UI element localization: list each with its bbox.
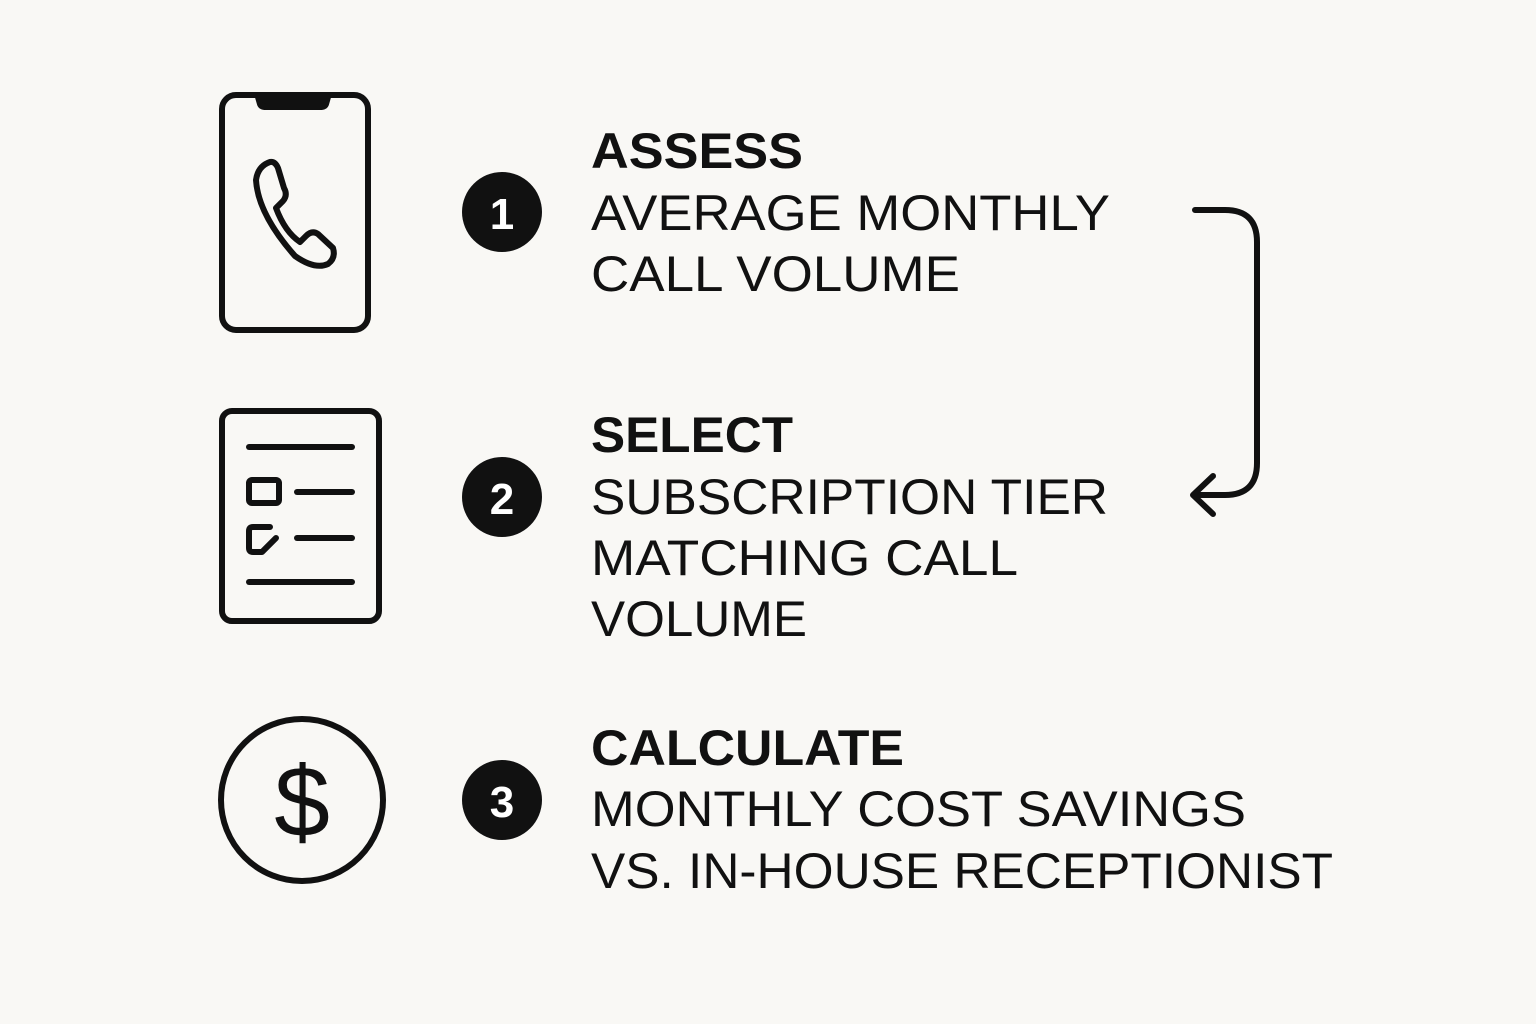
step 2 text: MATCHING CALL xyxy=(591,530,1018,586)
icon: phone xyxy=(222,95,368,330)
step 3 text: CALCULATE xyxy=(591,720,904,776)
icon: dollar coin: $ xyxy=(274,746,330,858)
step 1 text: CALL VOLUME xyxy=(591,246,960,302)
step 3 badge xyxy=(462,760,542,840)
step 1 text: AVERAGE MONTHLY xyxy=(591,185,1110,241)
step 2 badge: 2 xyxy=(490,475,514,524)
step 3 text: MONTHLY COST SAVINGS xyxy=(591,781,1246,837)
arrow: step 1 to step 2 xyxy=(1193,210,1257,514)
step 2 text: SELECT xyxy=(591,407,793,463)
icon: checklist document xyxy=(222,411,379,621)
step 1 badge xyxy=(462,172,542,252)
step 1 text xyxy=(591,123,1110,302)
step 1 text: ASSESS xyxy=(591,123,803,179)
step 2 badge xyxy=(462,457,542,537)
step 1 badge: 1 xyxy=(490,190,514,239)
step 3 text xyxy=(591,720,1333,899)
step 2 text xyxy=(591,407,1108,647)
step 2 text: SUBSCRIPTION TIER xyxy=(591,469,1108,525)
step 2 text: VOLUME xyxy=(591,591,807,647)
icon: dollar coin xyxy=(221,719,383,881)
step 3 badge: 3 xyxy=(490,778,514,827)
step 3 text: VS. IN-HOUSE RECEPTIONIST xyxy=(591,843,1333,899)
